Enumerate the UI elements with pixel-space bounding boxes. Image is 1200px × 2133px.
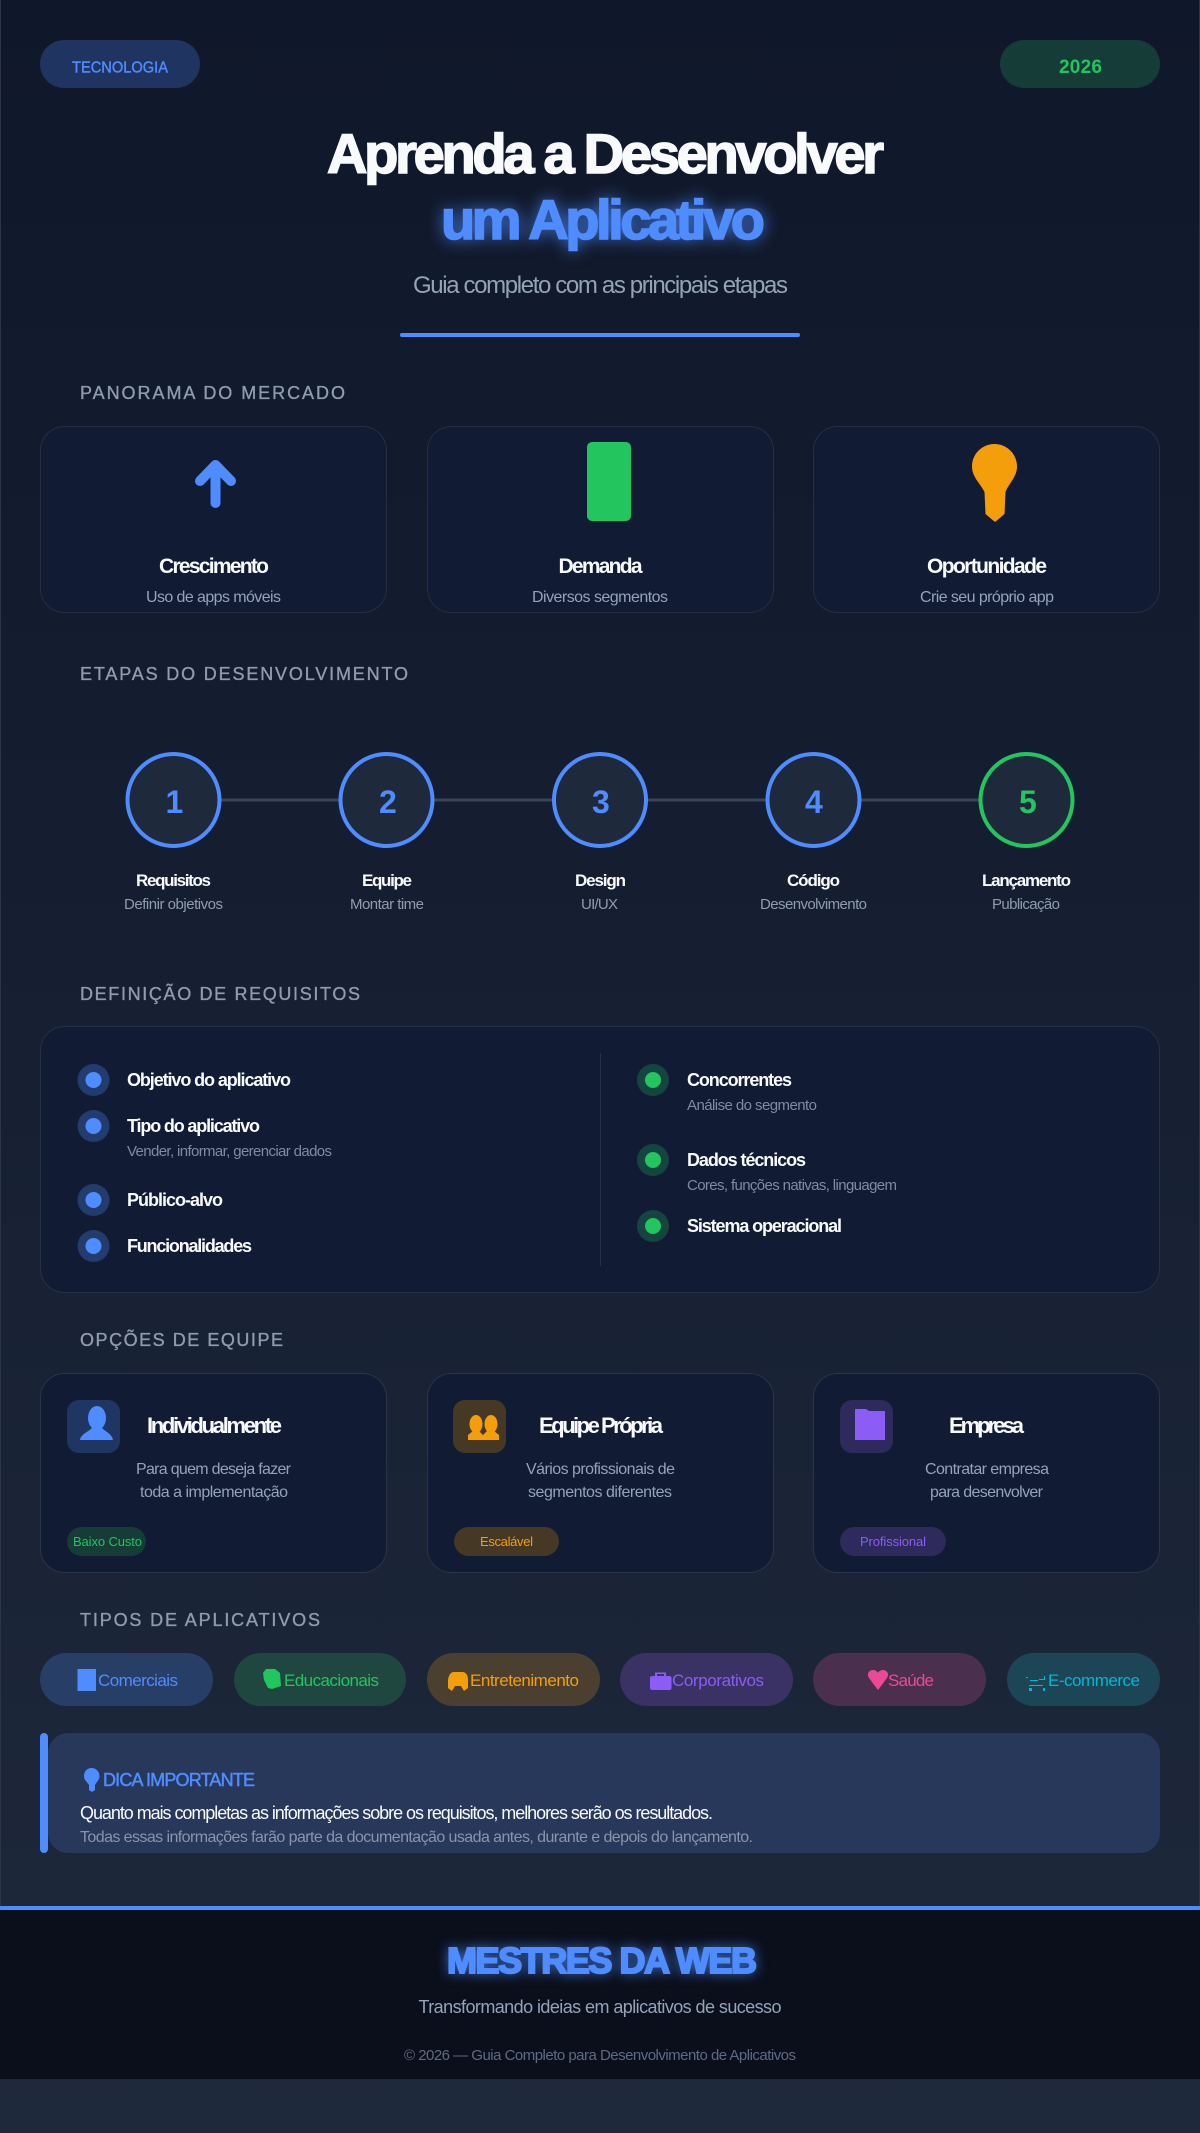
item: concorrentes bbox=[637, 1064, 817, 1114]
heading: etapas do desenvolvimento: ETAPAS DO DESENVOLVIMENTO bbox=[80, 664, 408, 684]
footer copyright: © 2026 — Guia Completo para Desenvolvimento de Aplicativos bbox=[404, 2047, 796, 2064]
chip: entretenimento bbox=[427, 1653, 600, 1706]
tag: baixo custo: Baixo Custo bbox=[73, 1534, 142, 1549]
icon: two people bbox=[453, 1400, 506, 1453]
title underline bbox=[400, 333, 800, 337]
tag: profissional bbox=[840, 1527, 946, 1556]
badge: tecnologia bbox=[40, 40, 200, 88]
item: publico-alvo bbox=[78, 1184, 223, 1216]
panel: individualmente bbox=[40, 1374, 386, 1572]
step 3 bbox=[554, 754, 646, 913]
footer bbox=[0, 1906, 1200, 2079]
step 5: Publicação bbox=[992, 896, 1060, 913]
panel: oportunidade: Oportunidade bbox=[927, 555, 1047, 578]
callout: dica importante: Quanto mais completas as informações sobre os requisitos, melhores serão os resultados. bbox=[80, 1803, 713, 1823]
icon: briefcase bbox=[650, 1672, 672, 1690]
tag: baixo custo bbox=[67, 1527, 146, 1556]
badge: 2026: 2026 bbox=[1059, 57, 1102, 78]
chip: entretenimento: Entretenimento bbox=[470, 1671, 579, 1690]
step 3: Design bbox=[575, 871, 626, 890]
step 4 bbox=[760, 754, 867, 913]
step 4: Código bbox=[787, 871, 840, 890]
chip: comerciais bbox=[40, 1653, 213, 1706]
item: sistema operacional: Sistema operacional bbox=[687, 1216, 842, 1236]
item: funcionalidades bbox=[78, 1230, 252, 1262]
panel: demanda: Diversos segmentos bbox=[532, 589, 668, 606]
panel: crescimento: Crescimento bbox=[159, 555, 269, 578]
panel: requisitos bbox=[40, 1026, 1160, 1292]
icon: light bulb bbox=[972, 444, 1017, 522]
chip: educacionais: Educacionais bbox=[284, 1671, 379, 1690]
step 1: 1 bbox=[166, 784, 183, 820]
callout: dica importante bbox=[40, 1733, 1160, 1853]
panel: crescimento: Uso de apps móveis bbox=[146, 589, 281, 606]
step 2: Equipe bbox=[362, 871, 412, 890]
step 1: Requisitos bbox=[136, 871, 211, 890]
chip: e-commerce: E-commerce bbox=[1048, 1671, 1140, 1690]
callout: dica importante: Todas essas informações farão parte da documentação usada antes, durante e depois do lançamento. bbox=[80, 1829, 753, 1846]
step 3: UI/UX bbox=[581, 896, 618, 913]
heading: panorama do mercado: PANORAMA DO MERCADO bbox=[80, 383, 345, 403]
step 5: 5 bbox=[1019, 784, 1037, 820]
timeline: etapas bbox=[124, 754, 1072, 913]
footer brand: MESTRES DA WEB bbox=[447, 1940, 757, 1981]
panel: demanda bbox=[428, 426, 774, 612]
tag: profissional: Profissional bbox=[860, 1534, 926, 1549]
icon: folder bbox=[840, 1400, 893, 1453]
heading: opcoes de equipe: OPÇÕES DE EQUIPE bbox=[80, 1329, 283, 1350]
heading: definicao de requisitos: DEFINIÇÃO DE REQUISITOS bbox=[80, 983, 360, 1004]
heading: tipos de aplicativos: TIPOS DE APLICATIVOS bbox=[80, 1610, 320, 1630]
item: funcionalidades: Funcionalidades bbox=[127, 1236, 252, 1256]
step 2 bbox=[340, 754, 432, 913]
item: publico-alvo: Público-alvo bbox=[127, 1190, 223, 1210]
item: dados tecnicos: Dados técnicos bbox=[687, 1150, 806, 1170]
step 2: Montar time bbox=[350, 896, 424, 913]
panel: empresa: para desenvolver bbox=[930, 1484, 1044, 1501]
icon: small bulb bbox=[84, 1768, 100, 1792]
title: Aprenda a Desenvolver bbox=[327, 122, 884, 185]
item: dados tecnicos: Cores, funções nativas, linguagem bbox=[687, 1177, 897, 1194]
chip: corporativos bbox=[620, 1653, 793, 1706]
chip: e-commerce bbox=[1007, 1653, 1160, 1706]
icon: globe bbox=[263, 1669, 281, 1689]
step 1 bbox=[124, 754, 223, 913]
panel: empresa bbox=[814, 1374, 1160, 1572]
panel: individualmente: toda a implementação bbox=[140, 1484, 288, 1501]
panel: empresa: Empresa bbox=[949, 1413, 1025, 1438]
item: sistema operacional bbox=[637, 1210, 842, 1242]
step 5: Lançamento bbox=[982, 871, 1071, 890]
subtitle: Guia completo com as principais etapas bbox=[413, 272, 788, 299]
icon: book bbox=[78, 1669, 96, 1691]
chip: saude bbox=[813, 1653, 986, 1706]
item: tipo: Vender, informar, gerenciar dados bbox=[127, 1143, 332, 1160]
step 5 bbox=[980, 754, 1072, 913]
badge: tecnologia: TECNOLOGIA bbox=[72, 60, 168, 76]
panel: empresa: Contratar empresa bbox=[925, 1461, 1049, 1478]
icon: up arrow bbox=[200, 465, 231, 503]
step 2: 2 bbox=[379, 784, 397, 820]
chip: saude: Saúde bbox=[888, 1671, 934, 1690]
footer tagline: Transformando ideias em aplicativos de sucesso bbox=[418, 1997, 782, 2017]
panel: equipe propria: Equipe Própria bbox=[539, 1413, 664, 1438]
chip: educacionais bbox=[234, 1653, 406, 1706]
tag: escalavel bbox=[454, 1527, 559, 1556]
icon: cart bbox=[1026, 1676, 1045, 1691]
panel: demanda: Demanda bbox=[558, 555, 643, 578]
tag: escalavel: Escalável bbox=[480, 1534, 533, 1549]
icon: person bbox=[67, 1400, 120, 1453]
step 4: 4 bbox=[805, 784, 823, 820]
panel: equipe propria: segmentos diferentes bbox=[528, 1484, 672, 1501]
step 3: 3 bbox=[592, 784, 610, 820]
item: dados tecnicos bbox=[637, 1144, 897, 1194]
badge: 2026 bbox=[1000, 40, 1160, 88]
item: objetivo bbox=[78, 1064, 291, 1096]
icon: heart bbox=[868, 1670, 888, 1690]
panel: crescimento bbox=[40, 426, 386, 612]
title: um Aplicativo bbox=[441, 188, 765, 251]
panel: equipe propria: Vários profissionais de bbox=[526, 1461, 675, 1478]
chip: comerciais: Comerciais bbox=[98, 1671, 178, 1690]
title bbox=[327, 122, 884, 251]
panel: individualmente: Individualmente bbox=[147, 1413, 282, 1438]
chip: corporativos: Corporativos bbox=[672, 1671, 764, 1690]
item: tipo bbox=[78, 1110, 332, 1160]
step 4: Desenvolvimento bbox=[760, 896, 867, 913]
panel: oportunidade bbox=[814, 426, 1160, 612]
item: objetivo: Objetivo do aplicativo bbox=[127, 1070, 291, 1090]
item: concorrentes: Concorrentes bbox=[687, 1070, 792, 1090]
step 1: Definir objetivos bbox=[124, 896, 223, 913]
panel: individualmente: Para quem deseja fazer bbox=[136, 1461, 292, 1478]
icon: gamepad bbox=[448, 1672, 468, 1691]
callout: dica importante: DICA IMPORTANTE bbox=[103, 1770, 255, 1790]
item: concorrentes: Análise do segmento bbox=[687, 1097, 817, 1114]
icon: phone bbox=[587, 442, 631, 521]
panel: equipe propria bbox=[428, 1374, 774, 1572]
panel: oportunidade: Crie seu próprio app bbox=[920, 589, 1054, 606]
item: tipo: Tipo do aplicativo bbox=[127, 1116, 260, 1136]
